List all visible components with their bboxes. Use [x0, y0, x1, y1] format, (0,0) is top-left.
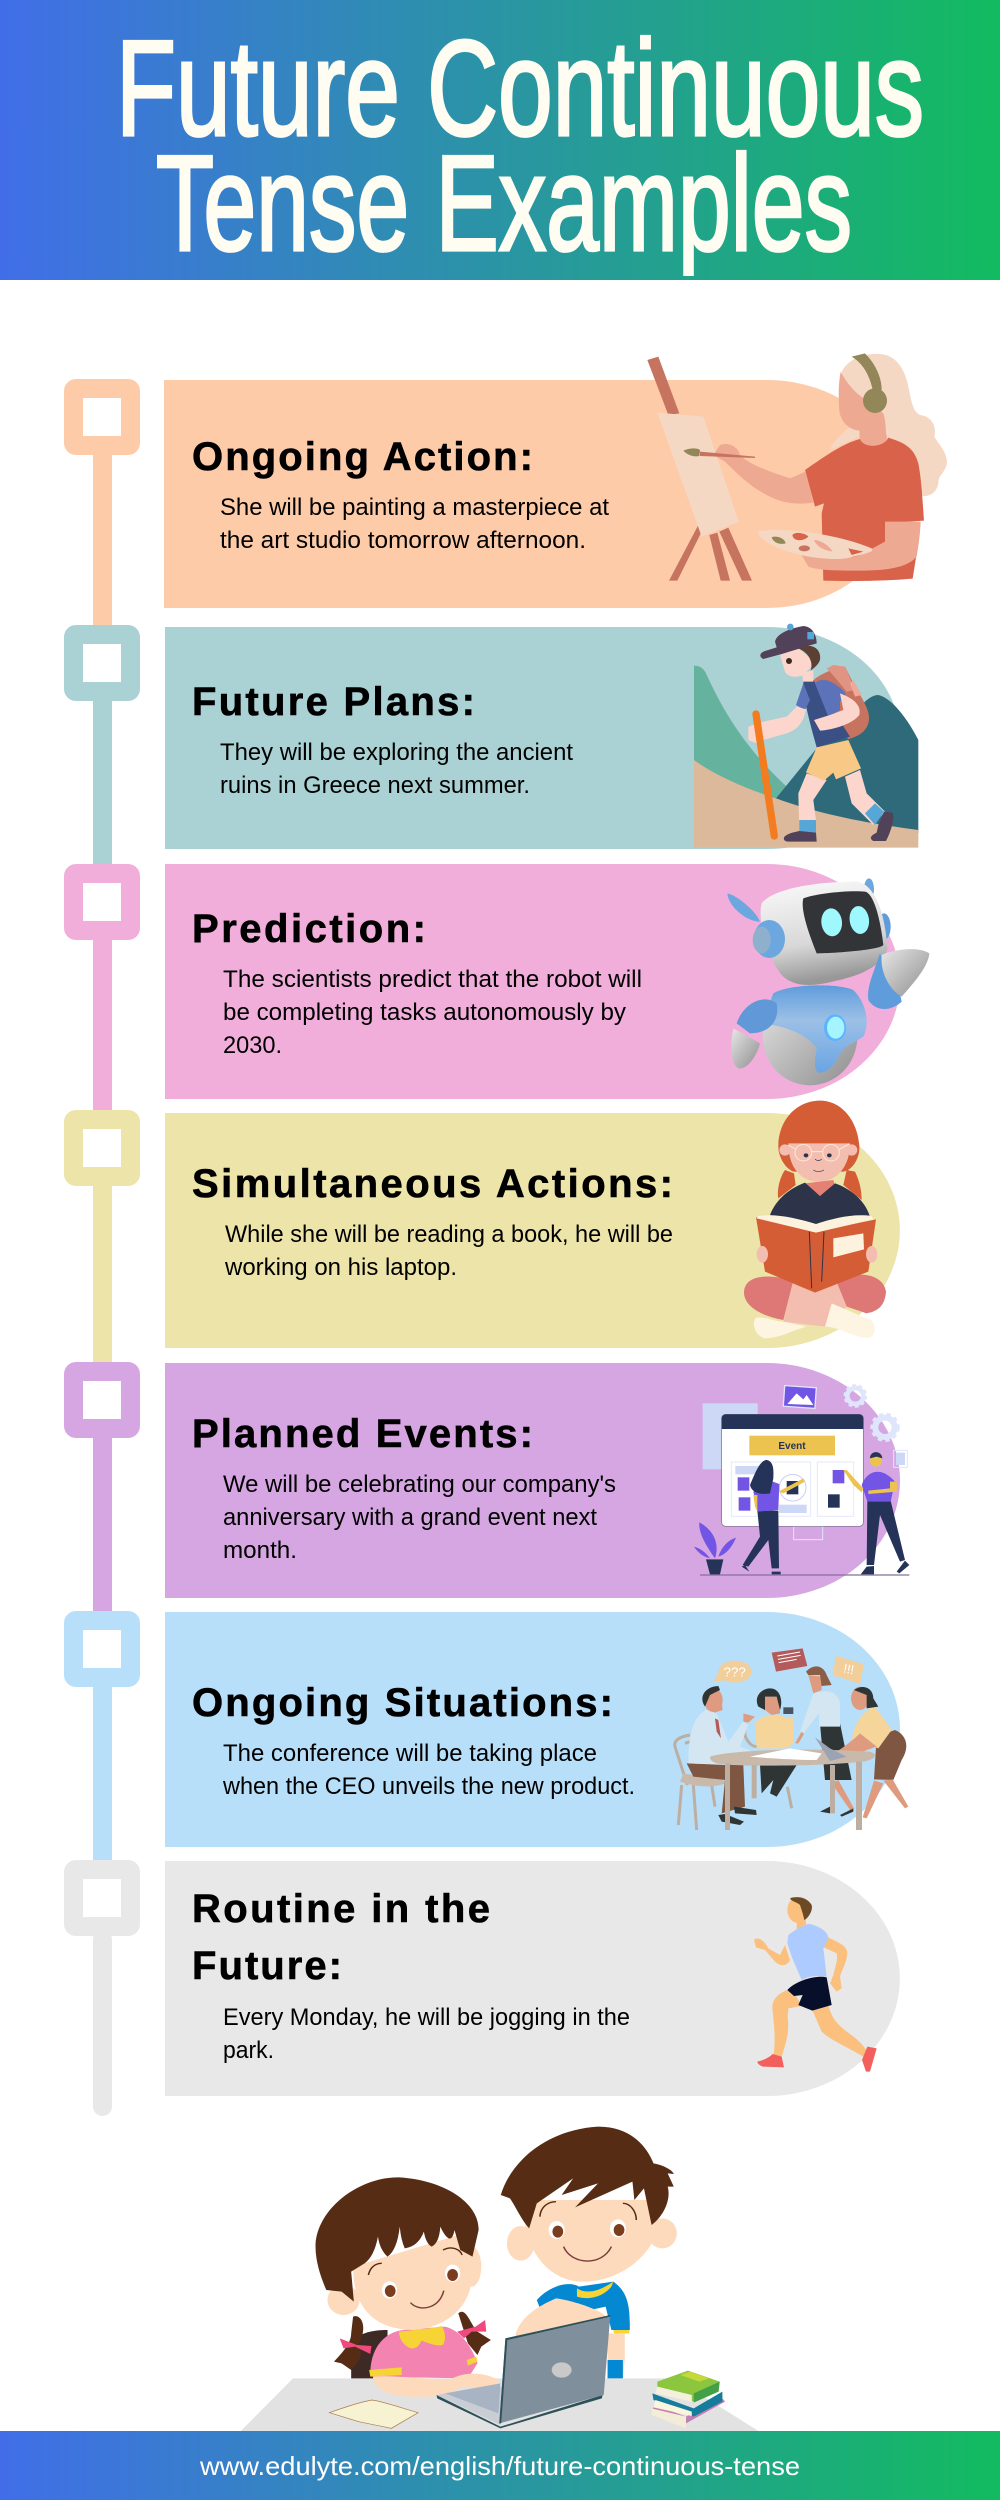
panel: routine in the future [165, 1861, 900, 2096]
heading: Simultaneous Actions: [192, 1162, 673, 1206]
heading: Future: [192, 1944, 342, 1988]
text block: 2030. [223, 1032, 282, 1059]
icon: two people at an event board [694, 1385, 909, 1575]
timeline node: purple [64, 1362, 140, 1615]
desk [240, 2378, 760, 2432]
text block: The scientists predict that the robot will [223, 966, 642, 993]
illustration: two children with a laptop at a desk [240, 2127, 760, 2432]
panel: future plans [165, 624, 918, 849]
icon: cute robot waving [727, 878, 929, 1085]
text block [222, 1740, 635, 1800]
text block: the art studio tomorrow afternoon. [220, 527, 586, 554]
heading: Planned Events: [192, 1412, 533, 1456]
panel: ongoing situations [165, 1612, 908, 1847]
heading: Ongoing Action: [192, 435, 533, 479]
laptop [437, 2315, 610, 2428]
icon: four people meeting at a table [675, 1648, 908, 1830]
text block [223, 966, 642, 1059]
text block: park. [223, 2037, 274, 2064]
text block: While she will be reading a book, he will be [225, 1221, 673, 1248]
footer banner [0, 2431, 1000, 2500]
timeline node: peach [64, 379, 140, 630]
open notebook [329, 2400, 418, 2428]
panel: planned events [165, 1363, 909, 1598]
stack of books [652, 2371, 725, 2428]
timeline node: yellow [64, 1110, 140, 1366]
text block: The conference will be taking place [223, 1740, 597, 1767]
heading: Prediction: [192, 907, 426, 951]
heading: Ongoing Situations: [192, 1681, 613, 1725]
text block [224, 1221, 673, 1281]
panel: simultaneous actions [165, 1101, 900, 1348]
header banner [0, 0, 1000, 280]
girl [316, 2177, 499, 2397]
text block [220, 494, 609, 554]
heading: Routine in the [192, 1887, 490, 1931]
text block [223, 2004, 630, 2064]
timeline node: pink [64, 864, 140, 1115]
icon: four people meeting at a table: !!! [842, 1662, 855, 1677]
text block: They will be exploring the ancient [220, 739, 573, 766]
panel: prediction [165, 864, 929, 1099]
text block: anniversary with a grand event next [223, 1504, 597, 1531]
icon: woman painting at an easel [647, 353, 947, 581]
icon: hiker with backpack and walking stick [694, 624, 918, 848]
footer url: www.edulyte.com/english/future-continuous-tense [199, 2451, 800, 2481]
icon: girl reading a book [744, 1101, 886, 1338]
timeline node: grey [64, 1860, 140, 2116]
text block: We will be celebrating our company's [223, 1471, 616, 1498]
text block: be completing tasks autonomously by [223, 999, 626, 1026]
text block: when the CEO unveils the new product. [222, 1773, 635, 1800]
heading [192, 1887, 490, 1988]
timeline stems and nodes [64, 379, 140, 2116]
icon: two people at an event board: Event [778, 1441, 806, 1452]
icon: four people meeting at a table: ??? [724, 1665, 746, 1680]
heading: Future Plans: [192, 680, 475, 724]
text block: month. [223, 1537, 297, 1564]
title [122, 34, 922, 276]
boy [501, 2127, 677, 2378]
text block: working on his laptop. [224, 1254, 457, 1281]
text block [220, 739, 573, 799]
icon: man jogging [754, 1897, 877, 2072]
text block [223, 1471, 616, 1564]
timeline node: teal [64, 625, 140, 870]
timeline node: blue [64, 1611, 140, 1864]
text block: ruins in Greece next summer. [220, 772, 530, 799]
text block: She will be painting a masterpiece at [220, 494, 609, 521]
panel: ongoing action [164, 353, 947, 608]
text block: Every Monday, he will be jogging in the [223, 2004, 630, 2031]
